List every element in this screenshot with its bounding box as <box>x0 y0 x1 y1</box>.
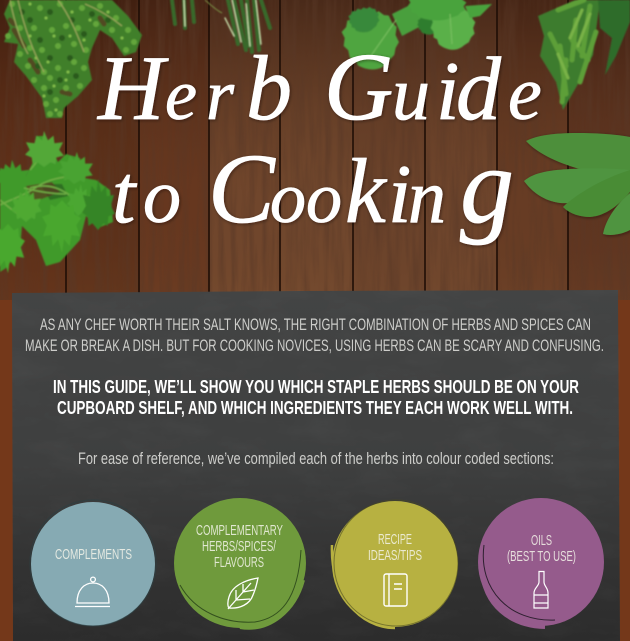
bold statement <box>53 377 579 418</box>
title line 2: g <box>460 127 514 246</box>
section: complementary herbs: COMPLEMENTARY <box>196 522 283 539</box>
section: complements <box>30 500 156 626</box>
title: Herb Guide to Cooking <box>97 33 542 246</box>
herb: cilantro <box>338 0 492 75</box>
title line 1: e <box>508 52 542 136</box>
title line 2: t <box>112 148 138 241</box>
icon: book <box>384 574 407 606</box>
title line 1: i <box>436 45 459 138</box>
section: oils: OILS <box>531 532 552 549</box>
icon: bottle <box>534 572 548 608</box>
title line 2: n <box>408 155 446 239</box>
title line 1: d <box>456 40 502 139</box>
panel: slate board <box>12 290 620 641</box>
section: complementary herbs: FLAVOURS <box>214 554 264 571</box>
section: recipe ideas <box>332 500 458 628</box>
herb: tarragon <box>538 0 630 110</box>
title line 1: u <box>392 52 430 136</box>
herb: rosemary <box>172 0 270 52</box>
section: recipe ideas: RECIPE <box>378 531 412 548</box>
section: complementary herbs: HERBS/SPICES/ <box>202 538 277 555</box>
title line 1: G <box>324 33 393 140</box>
title line 2: i <box>388 148 411 241</box>
title line 2: o <box>306 158 342 238</box>
icon: leaf <box>228 578 258 609</box>
section: recipe ideas: IDEAS/TIPS <box>368 547 422 564</box>
title line 1: r <box>206 55 235 135</box>
title line 2: C <box>208 133 276 244</box>
icon: cloche <box>75 577 110 606</box>
title line 2: o <box>270 158 306 238</box>
herb: parsley <box>0 131 115 273</box>
section: oils: (BEST TO USE) <box>507 548 576 565</box>
section: oils <box>478 498 604 627</box>
herb: thyme <box>4 0 142 118</box>
intro paragraph <box>25 315 604 355</box>
title line 1: e <box>165 55 197 135</box>
title line 2: k <box>345 140 388 242</box>
herb: sage <box>524 133 630 235</box>
title line 1: H <box>97 37 169 139</box>
title line 2: o <box>143 155 181 239</box>
title line 1: b <box>246 37 292 139</box>
section: complementary herbs <box>174 498 306 628</box>
section: complements: COMPLEMENTS <box>55 546 132 563</box>
